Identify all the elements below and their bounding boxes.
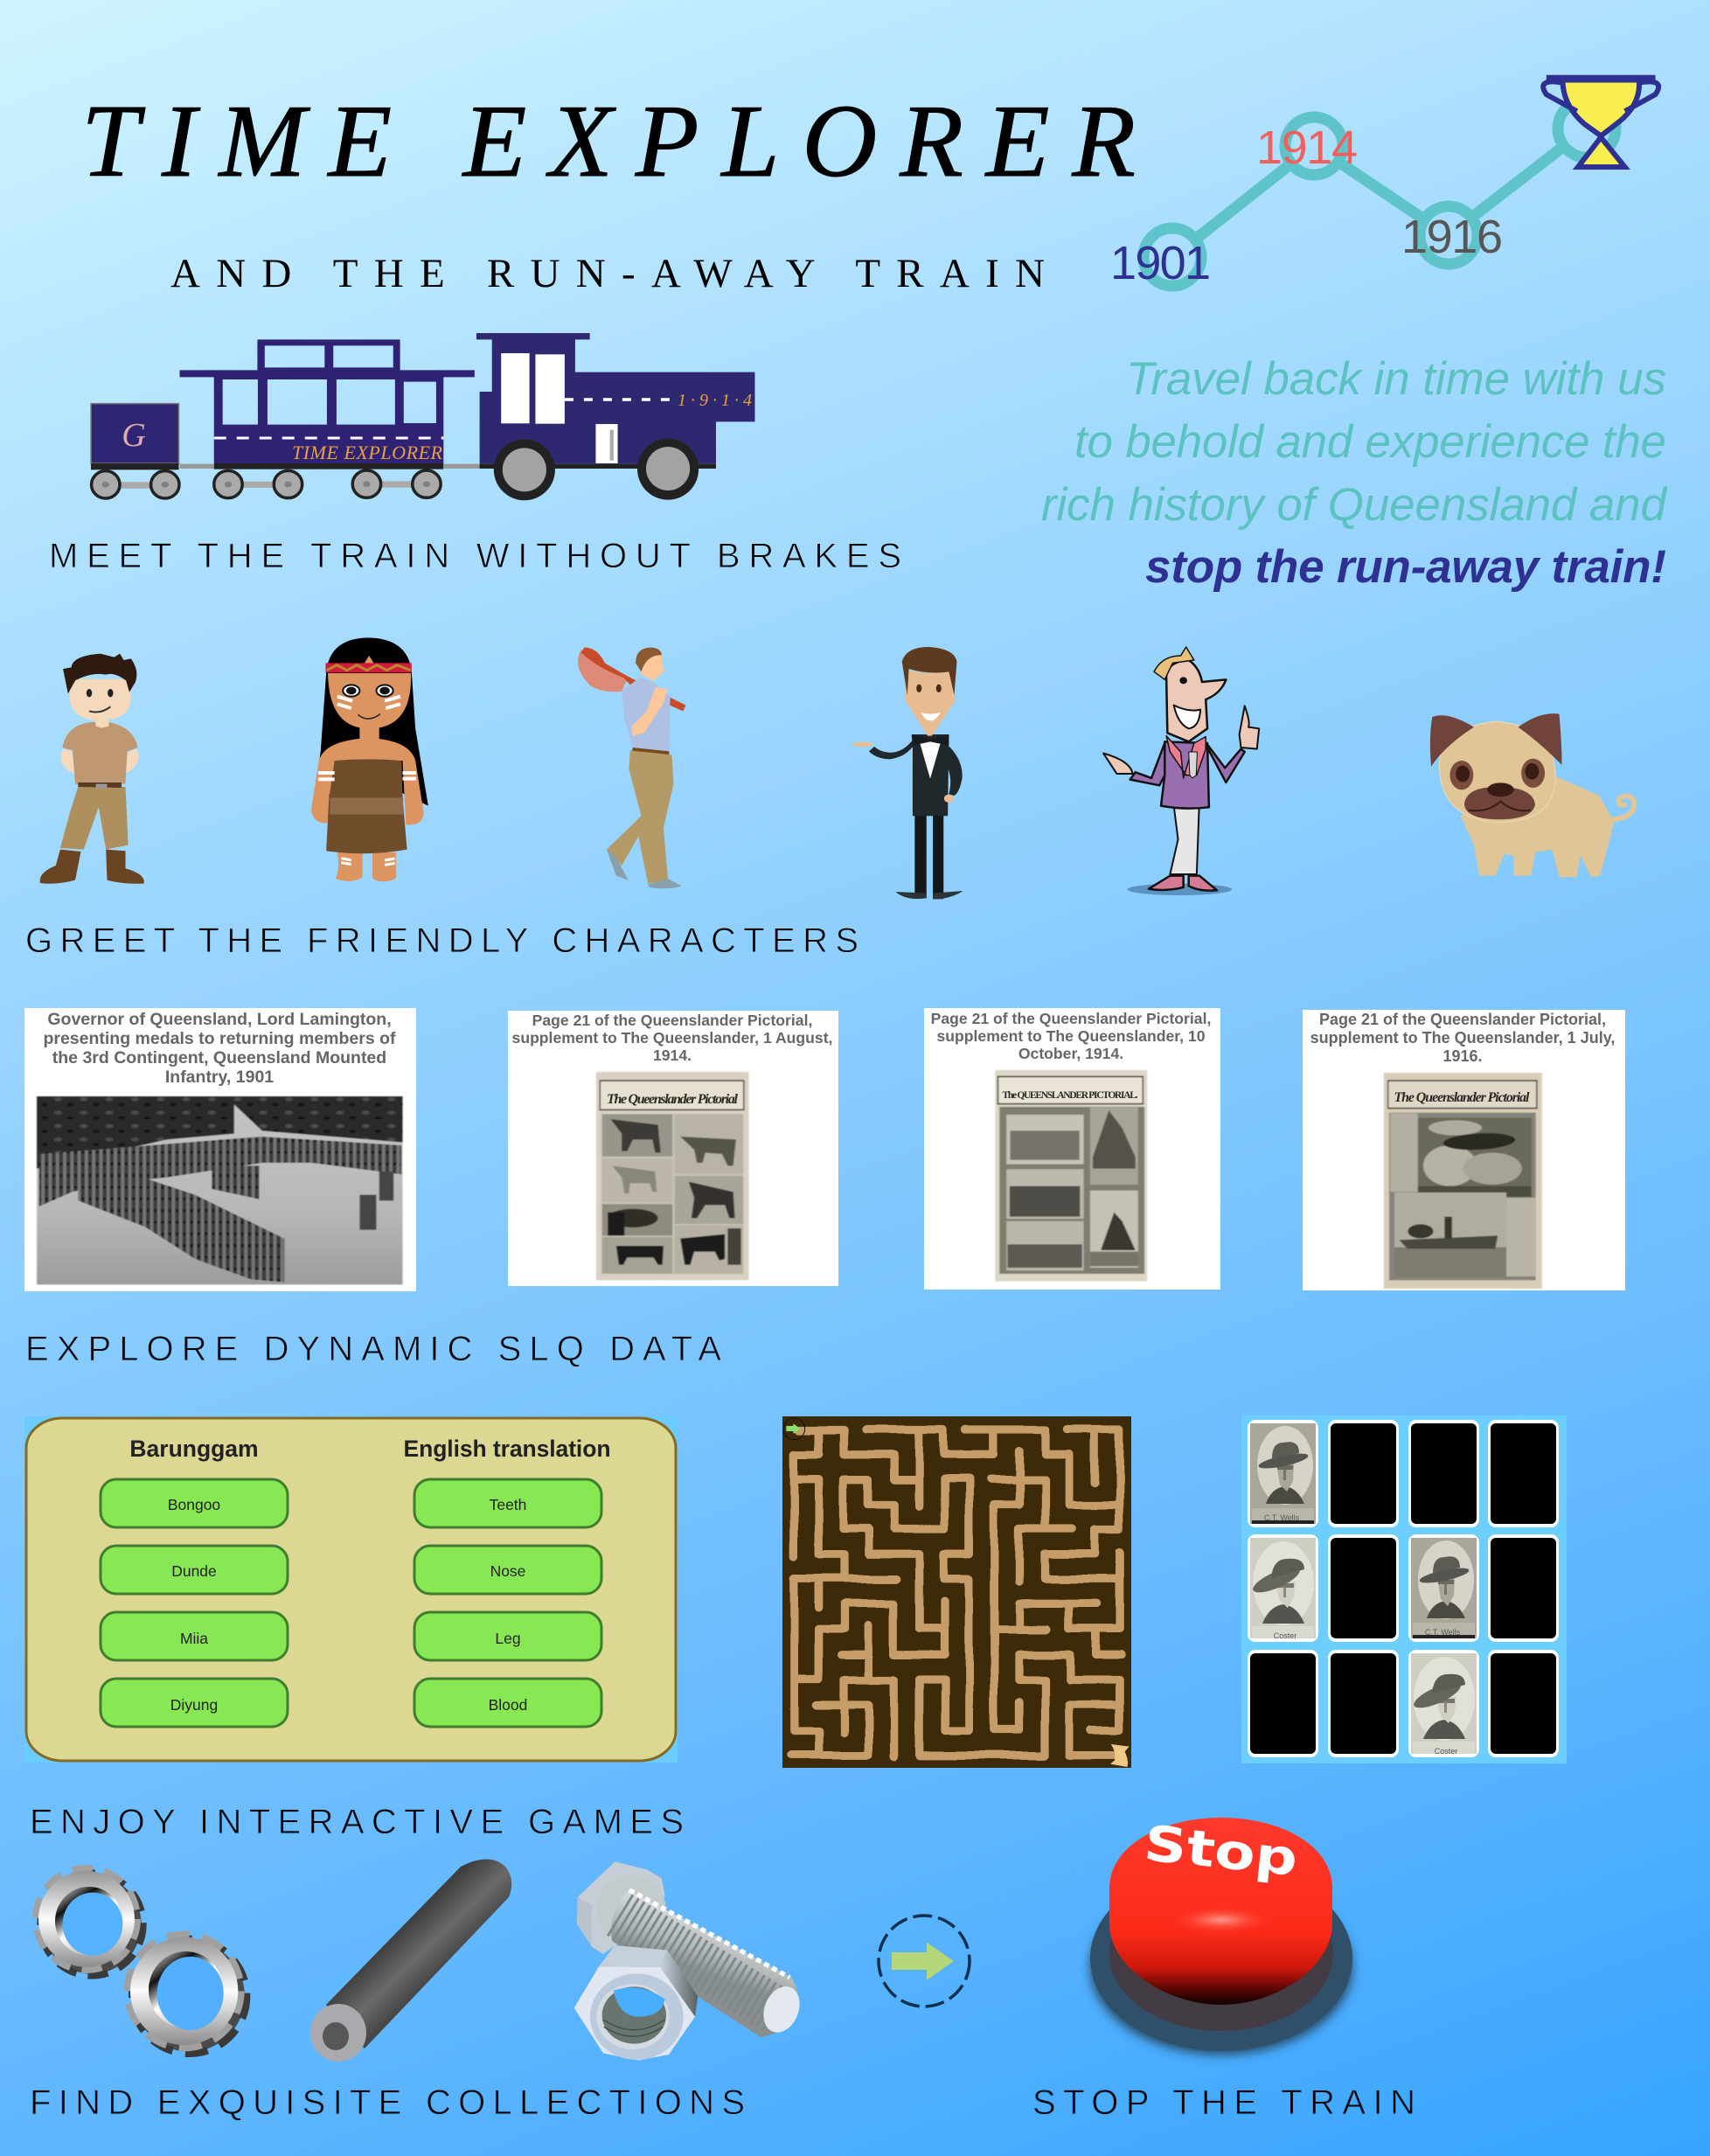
caption: October 1914 [931,1010,1211,1062]
intro text block: rich history of Queensland and [1041,479,1668,531]
icon: metal tube [310,1859,511,2062]
icon: trophy [1543,78,1658,167]
hex nut [574,1945,698,2061]
word labels: Diyung [170,1696,218,1714]
portrait card: Coster [1250,1538,1316,1640]
caption: 1901: presenting medals to returning members of [43,1029,396,1048]
characters row [40,637,1634,899]
maze paths [791,1429,1122,1757]
icon: stop button [1090,1815,1352,2055]
icon: bolt and nut [574,1861,806,2061]
locomotive lettering: 1·9·1·4 [678,391,752,410]
icon: gears [36,1868,247,2054]
title: TIME EXPLORER [81,83,1136,198]
button base [1090,1866,1352,2055]
word labels: Bongoo [168,1496,220,1513]
buttons: Barunggam words [101,1479,288,1727]
caption: August 1914: 1914. [653,1047,692,1064]
timeline with years and trophy [1110,78,1658,289]
year 1916: 1916 [1401,211,1503,263]
caption: July 1916: 1916. [1442,1047,1483,1065]
portrait card: C.T. Wells [1250,1423,1316,1524]
intro text block: stop the run-away train! [1145,541,1666,593]
small wheels [92,470,441,498]
panel: October 1914 page [924,1008,1220,1290]
bolt thread [611,1890,806,2038]
train illustration [91,333,754,500]
word labels: Miia [180,1630,208,1647]
newspaper masthead: The QUEENSLANDER PICTORIAL. [1002,1090,1138,1101]
portrait card: Coster match: Coster [1435,1747,1457,1756]
Stop label: Stop [1142,1815,1300,1888]
caption: October 1914: October, 1914. [1018,1045,1123,1062]
heading: interactive games: ENJOY INTERACTIVE GAMES [30,1803,684,1841]
icon: dashed circle arrow [879,1916,970,2006]
photo: soldiers on parade [37,1096,402,1284]
intro text block: to behold and experience the [1074,416,1666,468]
portrait card: Coster match [1411,1653,1477,1756]
heading: greet the characters: GREET THE FRIENDLY CHARACTERS [25,922,858,960]
word labels: Dunde [171,1562,217,1580]
character: indigenous girl [311,637,428,881]
heading: meet the train: MEET THE TRAIN WITHOUT BRAKES [49,537,901,575]
tender wagon [91,404,178,469]
newspaper masthead: The Queenslander Pictorial [607,1092,739,1107]
character: pug dog [1430,713,1634,877]
newspaper page: stud stock [596,1072,749,1280]
caption: July 1916 [1310,1011,1615,1065]
intro text block: Travel back in time with us [1126,353,1666,405]
caption: July 1916: supplement to The Queenslander, 1 July, [1310,1029,1615,1047]
panel: language matching game [24,1416,678,1763]
caption: August 1914 [512,1012,832,1064]
card backs [1248,1420,1559,1757]
newspaper masthead: The Queenslander Pictorial [1394,1090,1530,1105]
buttons: English words [414,1479,601,1727]
column heading: Barunggam: Barunggam [129,1436,259,1462]
panel: memory card game [1241,1415,1567,1763]
caption: August 1914: Page 21 of the Queenslander Pictorial, [532,1012,812,1029]
heading: explore data: EXPLORE DYNAMIC SLQ DATA [25,1330,721,1368]
word labels: Teeth [490,1496,526,1513]
locomotive [476,333,754,500]
caption: 1901: the 3rd Contingent, Queensland Mounted [52,1048,386,1068]
character: cartoon presenter [1103,647,1259,895]
panel: July 1916 page [1303,1010,1625,1290]
bolt head [577,1861,666,1954]
year 1901: 1901 [1110,237,1211,289]
red dome [1109,1818,1332,2005]
carriage lettering: TIME EXPLORER [292,442,443,463]
caption: 1901: Governor of Queensland, Lord Lamington, [47,1010,392,1029]
word labels: Nose [490,1562,525,1580]
word labels: Leg [495,1630,521,1647]
newspaper page: line of battle [995,1070,1147,1282]
maze start arrow [783,1418,805,1440]
character: man with guitar [578,648,685,888]
carriage [180,339,475,469]
portrait card: C.T. Wells match: C.T. Wells [1425,1628,1461,1637]
year 1914: 1914 [1256,122,1358,174]
portrait card: C.T. Wells: C.T. Wells [1264,1513,1300,1522]
portrait card: C.T. Wells match [1411,1538,1477,1638]
timeline line and rings [1143,100,1616,286]
caption: July 1916: Page 21 of the Queenslander Pictorial, [1319,1011,1606,1028]
word labels: Blood [489,1696,527,1714]
panel: 1901 photograph [24,1008,416,1291]
heading: stop the train: STOP THE TRAIN [1032,2083,1415,2122]
caption: October 1914: Page 21 of the Queenslander Pictorial, [931,1010,1211,1027]
wagon letter: G [122,417,146,454]
panel: August 1914 page [508,1011,838,1286]
portrait card: Coster: Coster [1274,1631,1296,1640]
caption: October 1914: supplement to The Queenslander, 10 [937,1027,1206,1045]
intro text block [1041,353,1668,593]
column heading: English translation: English translation [404,1436,610,1462]
subtitle: AND THE RUN-AWAY TRAIN [170,251,1045,296]
gear two [128,1935,247,2054]
gear one [36,1868,143,1976]
character: man in tuxedo [852,647,963,899]
panel: maze game [782,1416,1131,1768]
word labels [168,1496,527,1714]
character: boy explorer [40,654,144,884]
caption: August 1914: supplement to The Queenslander, 1 August, [512,1029,832,1047]
maze goal scroll [1110,1744,1130,1767]
couplers [180,464,480,469]
caption: 1901 [43,1010,396,1087]
newspaper page: aerial arm [1384,1073,1542,1289]
caption: 1901: Infantry, 1901 [165,1068,274,1087]
heading: exquisite collections: FIND EXQUISITE COLLECTIONS [30,2083,745,2122]
